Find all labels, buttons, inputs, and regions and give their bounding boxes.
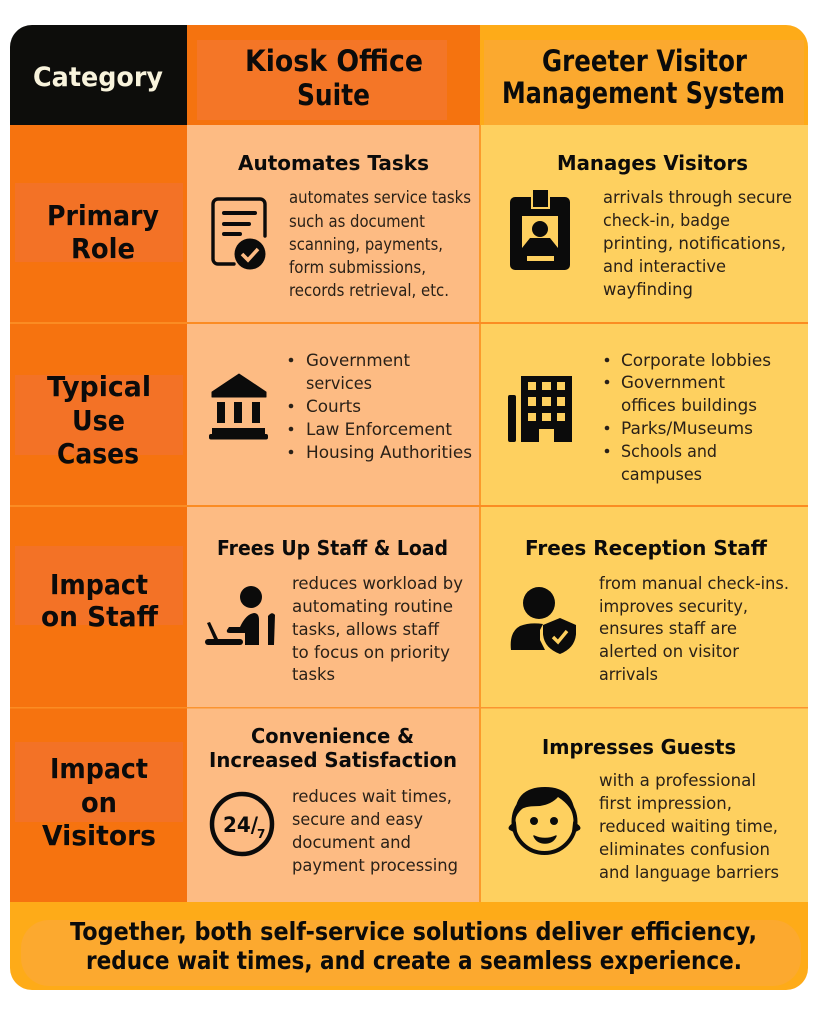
text block — [289, 188, 471, 301]
row label: Typical Use Cases — [15, 375, 183, 464]
icon: document with check — [213, 199, 266, 270]
row label: Typical Use Cases: Use — [72, 404, 125, 437]
panel: category column background — [10, 125, 187, 902]
icon: person with shield — [511, 587, 576, 654]
icon: 24/7 circle: 7 — [257, 827, 265, 841]
row label: Primary Role — [15, 183, 183, 265]
row label: Impact on Staff: on Staff — [41, 600, 158, 633]
cell: Frees Up Staff and Load — [205, 536, 463, 685]
row label: Impact on Staff: Impact — [50, 568, 148, 601]
bullet list — [289, 351, 472, 463]
bullet list: services — [306, 374, 372, 394]
bullet list: Housing Authorities — [306, 443, 472, 463]
row label: Typical Use Cases: Typical — [47, 370, 151, 403]
header: category: Category — [33, 62, 163, 93]
cell: Impresses Guests — [510, 735, 779, 883]
text block: and language barriers — [599, 863, 779, 883]
cell: Convenience and Increased Satisfaction: Increased Satisfaction — [209, 748, 457, 772]
bullet list: Schools and — [621, 442, 717, 462]
icon: smiling face — [510, 787, 579, 853]
text block: ensures staff are — [599, 619, 737, 639]
text block: reduced waiting time, — [599, 817, 778, 837]
text block: and interactive — [603, 257, 726, 277]
header: Greeter Visitor Management System — [480, 25, 808, 125]
row label: Primary Role: Role — [71, 232, 135, 265]
text block — [599, 574, 789, 685]
text block: to focus on priority — [292, 643, 450, 663]
icon: ID badge — [510, 190, 570, 270]
text block: with a professional — [599, 771, 756, 791]
heading: Convenience & — [251, 724, 414, 748]
heading: Frees Reception Staff — [525, 536, 768, 560]
text block — [603, 188, 792, 300]
bullet list — [605, 351, 771, 485]
bullet list: Corporate lobbies — [621, 351, 771, 371]
icon: office building — [508, 376, 572, 442]
icon: 24/7 circle — [212, 794, 272, 854]
panel: kiosk column cells background — [187, 125, 479, 902]
row label: Impact on Visitors: Visitors — [42, 819, 156, 852]
text block: records retrieval, etc. — [289, 281, 449, 301]
text block: alerted on visitor — [599, 642, 739, 662]
text block: wayfinding — [603, 280, 693, 300]
header: Kiosk Office Suite: Suite — [297, 78, 370, 112]
text block: arrivals — [599, 665, 658, 685]
cell: kiosk use cases — [209, 351, 472, 463]
text block — [599, 771, 779, 883]
heading: Impresses Guests — [542, 735, 736, 759]
text block: such as document — [289, 212, 425, 232]
text block: check-in, badge — [603, 211, 730, 231]
header: Kiosk Office Suite — [187, 25, 480, 125]
footer banner — [10, 902, 808, 990]
icon: person at laptop — [205, 586, 275, 645]
text block: from manual check-ins. — [599, 574, 789, 594]
text block: reduces workload by — [292, 574, 463, 594]
row label: Typical Use Cases: Cases — [57, 437, 139, 470]
bullet list: Parks/Museums — [621, 419, 753, 439]
panel: greeter column cells background — [481, 125, 808, 902]
text block: eliminates confusion — [599, 840, 770, 860]
text block: tasks — [292, 665, 335, 685]
row label: Impact on Visitors: on — [81, 786, 117, 819]
row label: Primary Role: Primary — [47, 199, 159, 232]
icon: government building — [209, 374, 268, 440]
bullet list: Courts — [306, 397, 361, 417]
text block — [292, 574, 463, 685]
text block: improves security, — [599, 597, 748, 617]
cell: Frees Reception Staff — [511, 536, 789, 685]
bullet list: Law Enforcement — [306, 420, 452, 440]
heading: Automates Tasks — [238, 151, 429, 175]
cell: Manages Visitors — [510, 151, 792, 300]
heading: Manages Visitors — [557, 151, 748, 175]
bullet list: Government — [306, 351, 410, 371]
text block: payment processing — [292, 856, 458, 876]
text block: secure and easy — [292, 810, 423, 830]
text block — [292, 787, 458, 876]
text block: form submissions, — [289, 258, 426, 278]
bullet list: campuses — [621, 465, 702, 485]
text block: automates service tasks — [289, 188, 471, 208]
row label: Impact on Staff — [15, 546, 183, 633]
icon: 24/7 circle: 24/ — [223, 813, 258, 837]
row label: Impact on Visitors: Impact — [50, 752, 148, 785]
header: Greeter Visitor Management System: Greeter Visitor — [542, 44, 748, 78]
header: Kiosk Office Suite: Kiosk Office — [245, 44, 423, 78]
text block: reduces wait times, — [292, 787, 452, 807]
cell: Automates Tasks — [213, 151, 471, 301]
text block: first impression, — [599, 794, 732, 814]
text block: arrivals through secure — [603, 188, 792, 208]
text block: printing, notifications, — [603, 234, 786, 254]
cell: greeter use cases — [508, 351, 771, 485]
text block: scanning, payments, — [289, 235, 443, 255]
bullet list: offices buildings — [621, 396, 757, 416]
row label: Impact on Visitors — [15, 742, 183, 852]
heading: Frees Up Staff & Load — [217, 536, 448, 560]
cell: Convenience and Increased Satisfaction — [209, 724, 458, 876]
footer banner: Together, both self-service solutions deliver efficiency, — [70, 917, 757, 946]
text block: document and — [292, 833, 411, 853]
bullet list: Government — [621, 373, 725, 393]
header: category — [10, 25, 187, 125]
text block: automating routine — [292, 597, 453, 617]
text block: tasks, allows staff — [292, 620, 440, 640]
